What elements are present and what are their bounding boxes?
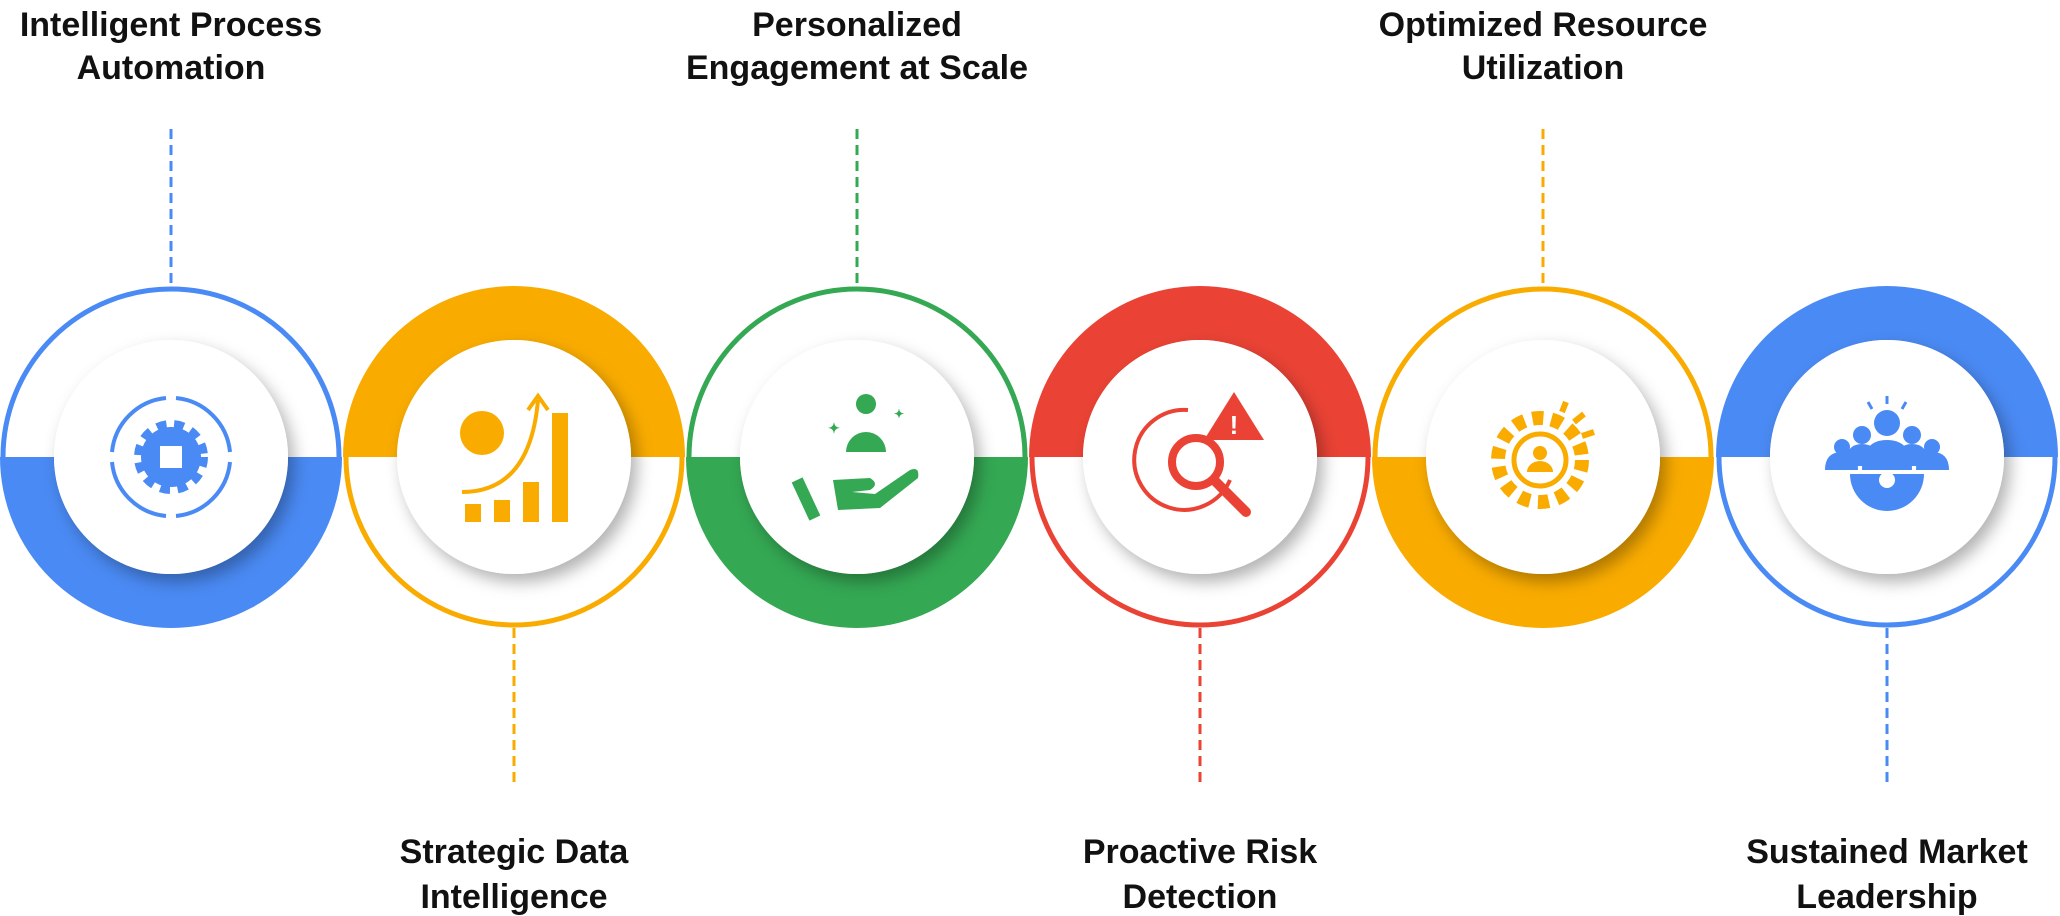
step 4: Proactive Risk Detection [1029,286,1371,916]
title: Personalized Engagement at Scale: Personalized [752,6,962,44]
icon: gear with chip and cycle arrows [112,398,230,516]
title: Intelligent Process Automation: Intelligent Process [20,6,322,44]
icon: risk magnifier with warning [1134,392,1264,512]
icon: team with gear [1825,396,1949,511]
title: Optimized Resource Utilization: Utilization [1462,49,1624,87]
title: Optimized Resource Utilization: Optimized Resource [1379,6,1707,44]
icon: hand holding person [792,394,918,521]
ring 1 [0,289,342,628]
ring 5 [1372,289,1714,628]
ring 6 [1716,286,2058,625]
icon: gear with person [1498,402,1594,502]
ring 3 [686,289,1028,628]
title: Personalized Engagement at Scale: Engagement at Scale [686,49,1028,87]
step 6: Sustained Market Leadership [1716,286,2058,916]
icon: risk magnifier with warning: ! [1230,410,1238,440]
title: Sustained Market Leadership: Sustained Market [1746,833,2028,871]
title: Sustained Market Leadership: Leadership [1796,878,1978,916]
title: Proactive Risk Detection: Proactive Risk [1083,833,1317,871]
title: Strategic Data Intelligence: Intelligence [420,878,608,916]
step 2: Strategic Data Intelligence [343,286,685,916]
step 1: Intelligent Process Automation [0,6,342,628]
icon: brain gear and growth chart [460,396,568,522]
ring 4 [1029,286,1371,625]
ring 2 [343,286,685,625]
step 5: Optimized Resource Utilization [1372,6,1714,628]
title: Proactive Risk Detection: Detection [1123,878,1277,916]
title: Intelligent Process Automation: Automation [77,49,265,87]
icon: hand holding person: ✦ [894,407,904,421]
icon: hand holding person: ✦ [828,420,840,436]
step 3: Personalized Engagement at Scale [686,6,1028,628]
title: Strategic Data Intelligence: Strategic Data [400,833,629,871]
